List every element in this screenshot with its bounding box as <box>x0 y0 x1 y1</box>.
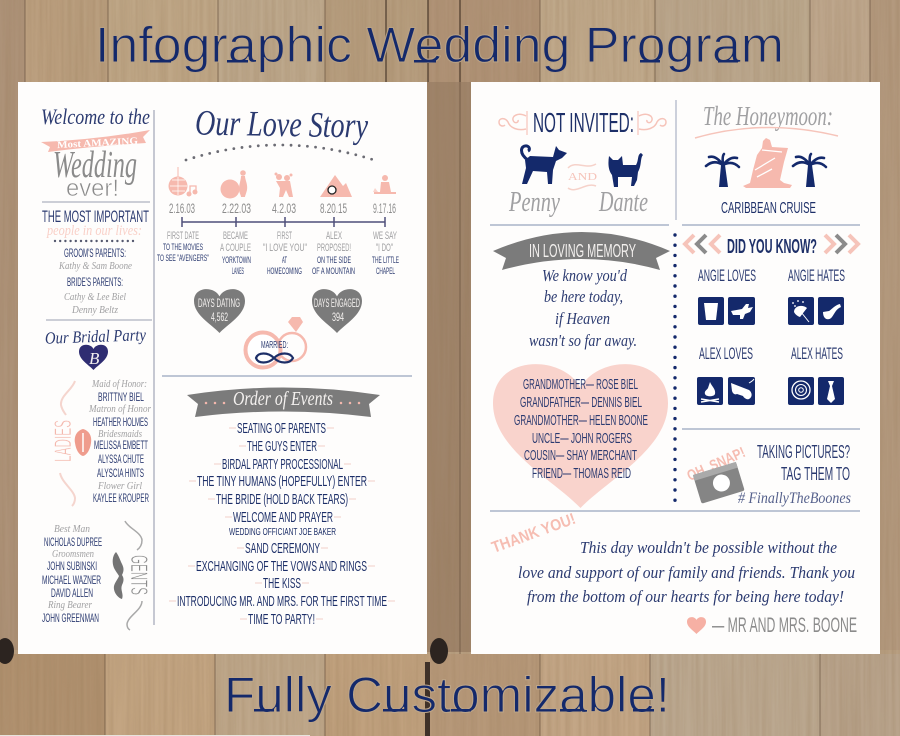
tag them text <box>738 442 851 507</box>
milestone labels: WE SAY <box>373 230 397 242</box>
order of events list: WELCOME AND PRAYER <box>233 509 333 526</box>
order of events banner: Order of Events <box>233 388 333 410</box>
gents label with mustache: GENTS <box>125 555 152 595</box>
gents list: JOHN SUBINSKI <box>47 559 97 573</box>
icon: cat <box>608 153 643 187</box>
married rings: MARRIED: <box>261 340 288 351</box>
thank you message: THANK YOU! <box>490 511 578 557</box>
angie hates <box>788 266 845 325</box>
icon: chapel couple <box>373 175 396 194</box>
memorial heart <box>493 364 668 508</box>
order of events list <box>169 420 395 628</box>
love story heading: Our Love Story <box>195 103 368 146</box>
milestone labels: TO SEE "AVENGERS" <box>157 253 209 264</box>
order of events list: THE GUYS ENTER <box>247 438 317 455</box>
milestone labels: ON THE SIDE <box>317 255 351 266</box>
bridal party heading: Our Bridal Party <box>45 325 147 348</box>
bridal party heading: B <box>89 349 100 368</box>
angie loves <box>698 266 756 325</box>
milestone labels: AT <box>282 255 287 266</box>
milestone labels: OF A MOUNTAIN <box>312 266 355 277</box>
milestone labels: THE LITTLE <box>372 255 399 266</box>
timeline: 8.20.15 <box>320 200 347 216</box>
heart: days dating: DAYS DATING <box>198 296 240 310</box>
most important people: Cathy & Lee Biel <box>64 291 126 303</box>
timeline: 4.2.03 <box>272 200 296 216</box>
in loving memory banner <box>493 232 670 270</box>
not invited heading <box>499 107 666 138</box>
order of events list: THE TINY HUMANS (HOPEFULLY) ENTER <box>197 473 367 490</box>
icon: cruise ship <box>743 138 792 188</box>
thank you message: This day wouldn't be possible without the <box>580 538 837 557</box>
thank you message <box>490 511 855 606</box>
milestone labels: FIRST DATE <box>167 230 199 242</box>
oh snap callout <box>684 444 748 504</box>
icon: dog <box>522 146 567 184</box>
oh snap callout: OH, SNAP! <box>684 444 748 485</box>
gents list: JOHN GREENMAN <box>42 611 99 625</box>
timeline: 2.22.03 <box>222 200 251 216</box>
most important people: Denny Beltz <box>71 304 119 316</box>
pet names: Penny <box>508 187 560 218</box>
icon: couple <box>274 172 293 197</box>
heart: days engaged: DAYS ENGAGED <box>314 296 360 310</box>
milestone labels: A COUPLE <box>220 242 251 254</box>
welcome heading: ever! <box>66 175 119 202</box>
gents list: NICHOLAS DUPREE <box>44 535 102 549</box>
order of events list: BIRDAL PARTY PROCESSIONAL <box>222 456 343 473</box>
signature with heart <box>687 614 857 637</box>
ladies list: Flower Girl <box>97 481 142 492</box>
memorial heart: FRIEND— THOMAS REID <box>532 466 631 482</box>
panel: left program page: 9.17.16 <box>373 200 396 216</box>
milestone labels: LANES <box>232 266 244 277</box>
welcome heading: Most AMAZING <box>57 136 138 151</box>
timeline icons <box>168 167 396 198</box>
order of events list: THE BRIDE (HOLD BACK TEARS) <box>216 491 348 508</box>
heart: days dating <box>194 289 245 333</box>
memorial heart: GRANDMOTHER— ROSE BIEL <box>523 377 638 393</box>
milestone labels: CHAPEL <box>376 266 395 277</box>
alex hates: ALEX HATES <box>791 344 843 363</box>
thank you message: from the bottom of our hearts for being here today! <box>527 587 844 606</box>
subtitle: Fully Customizable! <box>224 667 670 723</box>
order of events list: TIME TO PARTY! <box>248 611 315 628</box>
ladies list: Matron of Honor <box>88 404 152 415</box>
order of events list: SEATING OF PARENTS <box>237 420 326 437</box>
not invited heading: NOT INVITED: <box>533 107 634 138</box>
milestone labels: YORKTOWN <box>222 255 251 266</box>
bridal party heading <box>45 325 147 370</box>
alex loves <box>697 344 755 405</box>
icon: palm right <box>793 154 826 187</box>
memorial heart: COUSIN— SHAY MERCHANT <box>524 448 637 464</box>
memorial verse: We know you'd <box>542 266 627 285</box>
memorial heart: GRANDFATHER— DENNIS BIEL <box>520 395 642 411</box>
memorial heart: GRANDMOTHER— HELEN BOONE <box>514 413 648 429</box>
love story heading <box>186 103 374 160</box>
order of events list: SAND CEREMONY <box>245 540 320 557</box>
panel: right program page <box>471 82 880 654</box>
most important people <box>42 207 152 320</box>
memorial heart: UNCLE— JOHN ROGERS <box>532 431 632 447</box>
icon: disco ball <box>168 167 198 196</box>
milestone labels: HOMECOMING <box>267 266 302 277</box>
order of events list: THE KISS <box>263 575 301 592</box>
memorial verse <box>529 266 637 350</box>
welcome heading <box>41 104 150 202</box>
order of events list: EXCHANGING OF THE VOWS AND RINGS <box>196 558 367 575</box>
gents list: Groomsmen <box>52 549 94 560</box>
did you know heading: DID YOU KNOW? <box>727 236 817 258</box>
ladies list: KAYLEE KROUPER <box>93 491 149 505</box>
angie loves: ANGIE LOVES <box>698 266 756 285</box>
memorial verse: wasn't so far away. <box>529 331 637 350</box>
gents list: MICHAEL WAZNER <box>42 573 101 587</box>
most important people: people in our lives: <box>46 223 142 239</box>
milestone labels: "I LOVE YOU" <box>263 242 307 254</box>
ladies label with lips <box>50 381 91 506</box>
most important people: GROOM'S PARENTS: <box>64 248 126 260</box>
most important people: Kathy & Sam Boone <box>58 260 132 272</box>
order of events list: INTRODUCING MR. AND MRS. FOR THE FIRST TIME <box>177 593 387 610</box>
heart: days engaged <box>312 289 362 333</box>
honeymoon heading: The Honeymoon: <box>703 101 833 131</box>
icon: bowling <box>220 170 247 198</box>
timeline: 2.16.03 <box>169 200 195 216</box>
gents list: Best Man <box>54 524 90 535</box>
ladies list: HEATHER HOLMES <box>93 415 148 429</box>
pet names: Dante <box>598 187 648 218</box>
gents list: Ring Bearer <box>47 600 93 611</box>
gents label with mustache <box>113 521 152 630</box>
welcome heading: Welcome to the <box>41 104 150 129</box>
memorial verse: if Heaven <box>555 309 610 328</box>
ladies list: MELISSA EMBETT <box>94 438 148 452</box>
welcome heading: Wedding <box>53 144 137 186</box>
alex loves: ALEX LOVES <box>699 344 753 363</box>
most important people: BRIDE'S PARENTS: <box>67 277 123 289</box>
ladies list: ALYSCIA HINTS <box>97 466 144 480</box>
ladies list: Maid of Honor: <box>91 379 147 390</box>
timeline <box>169 200 396 227</box>
angie hates: ANGIE HATES <box>788 266 845 285</box>
ladies list: BRITTNY BIEL <box>98 390 144 404</box>
milestone labels: PROPOSED! <box>317 242 351 254</box>
thank you message: love and support of our family and friends. Thank you <box>518 563 855 582</box>
married rings <box>246 317 306 368</box>
caribbean cruise label: CARIBBEAN CRUISE <box>721 200 816 217</box>
milestone labels: TO THE MOVIES <box>163 242 203 253</box>
honeymoon heading <box>695 101 838 138</box>
milestone labels: FIRST <box>277 230 292 242</box>
ladies label with lips: LADIES <box>50 420 77 462</box>
heart: days dating: 4,562 <box>211 310 228 324</box>
milestone labels: "I DO" <box>376 242 393 254</box>
did you know heading <box>685 235 858 258</box>
milestone labels <box>157 230 399 277</box>
ladies list: Bridesmaids <box>98 429 142 440</box>
icon: palm left <box>706 154 739 187</box>
gents list: DAVID ALLEN <box>51 586 93 600</box>
milestone labels: ALEX <box>326 230 342 242</box>
order of events list: WEDDING OFFICIANT JOE BAKER <box>229 526 336 538</box>
icon: mountain with ring <box>320 175 352 197</box>
pet names <box>508 164 648 218</box>
heart: days engaged: 394 <box>332 310 344 324</box>
ladies list <box>88 379 152 505</box>
ladies list: ALYSSA CHUTE <box>98 452 144 466</box>
pet names: AND <box>568 171 597 183</box>
panel: left program page <box>18 82 427 654</box>
title: Infographic Wedding Program <box>95 17 784 73</box>
memorial verse: be here today, <box>544 287 623 306</box>
in loving memory banner: IN LOVING MEMORY <box>529 241 636 261</box>
alex hates <box>788 344 844 405</box>
order of events banner <box>187 388 380 417</box>
milestone labels: BECAME <box>223 230 248 242</box>
tag them text: TAG THEM TO <box>781 464 850 484</box>
tag them text: # FinallyTheBoones <box>738 490 851 507</box>
gents list <box>42 524 102 625</box>
most important people: THE MOST IMPORTANT <box>42 207 149 226</box>
